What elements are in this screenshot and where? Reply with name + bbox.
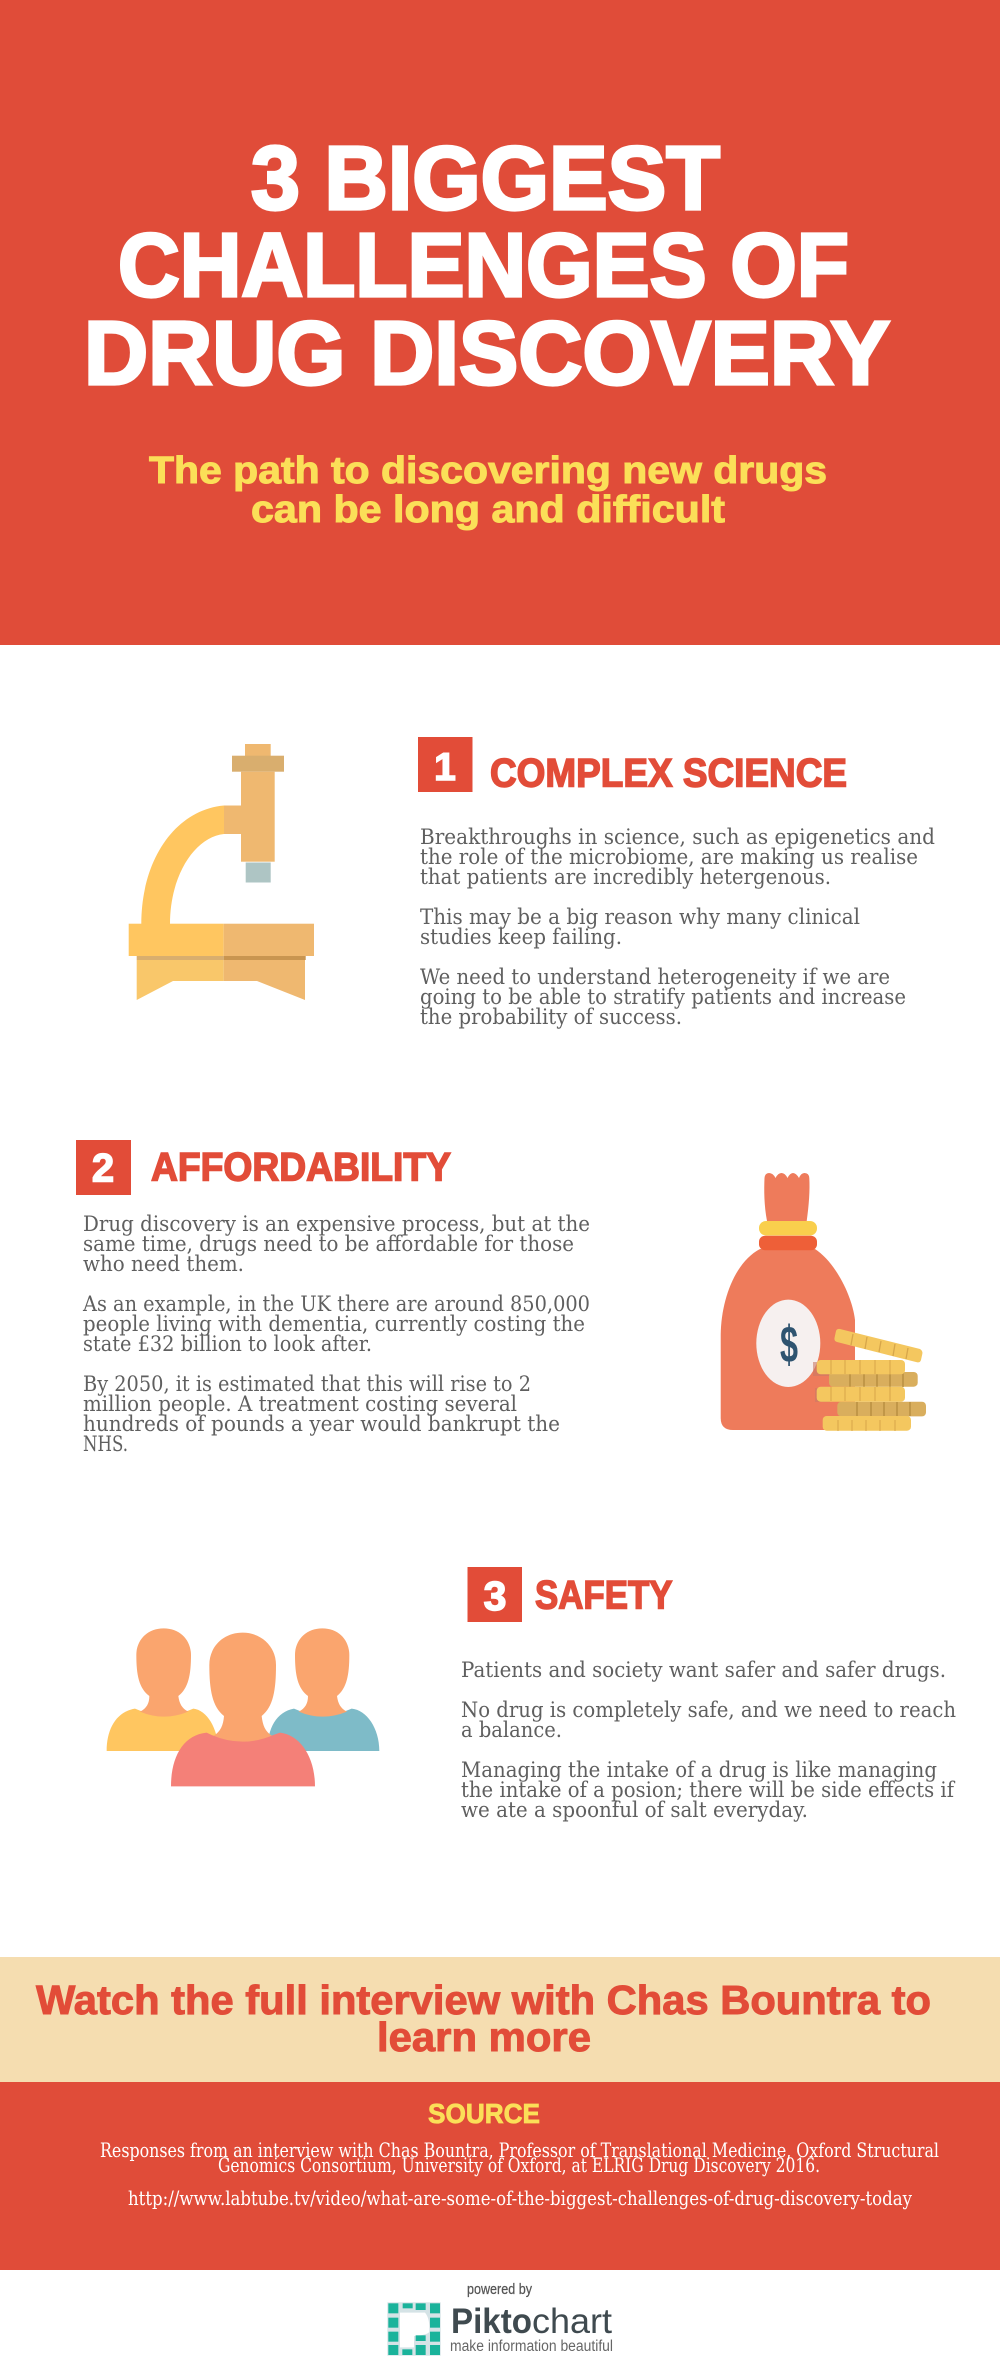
text block: complex science: the role of the microbiome, are making us realise: [420, 845, 918, 870]
text block: affordability: NHS.: [83, 1432, 128, 1457]
heading: affordability: AFFORDABILITY: [151, 1146, 451, 1190]
text block: affordability: As an example, in the UK there are around 850,000: [82, 1292, 590, 1317]
text block: affordability: million people. A treatment costing several: [83, 1392, 517, 1417]
text block: affordability: [82, 1212, 590, 1457]
panel: affordability: [76, 1140, 926, 1457]
number badge 1: 1: [434, 746, 456, 789]
panel: call to action: [0, 1957, 1000, 2082]
text block: affordability: Drug discovery is an expensive process, but at the: [83, 1212, 590, 1237]
call to action text: learn more: [377, 2014, 591, 2060]
text block: safety: we ate a spoonful of salt everyday.: [461, 1798, 808, 1823]
source text: Genomics Consortium, University of Oxford, at ELRIG Drug Discovery 2016.: [218, 2153, 820, 2177]
person: right: [267, 1628, 379, 1751]
icon: people: [107, 1628, 379, 1786]
text block: safety: Patients and society want safer and safer drugs.: [461, 1658, 946, 1683]
source text: [100, 2138, 939, 2210]
number badge 1: [418, 737, 472, 792]
call to action text: [36, 1977, 931, 2060]
subtitle: can be long and difficult: [251, 489, 725, 531]
title: CHALLENGES OF: [118, 216, 849, 316]
icon: money bag: $: [780, 1316, 798, 1374]
panel: piktochart footer: [387, 2281, 613, 2356]
text block: affordability: people living with dementia, currently costing the: [83, 1312, 585, 1337]
person: front: [171, 1633, 315, 1786]
text block: safety: the intake of a posion; there will be side effects if: [461, 1778, 956, 1803]
text block: affordability: state £32 billion to look after.: [83, 1332, 372, 1357]
text block: complex science: This may be a big reason why many clinical: [420, 905, 860, 930]
text block: complex science: the probability of success.: [420, 1005, 682, 1030]
panel: safety: [107, 1567, 956, 1823]
text block: affordability: By 2050, it is estimated that this will rise to 2: [83, 1372, 531, 1397]
text block: complex science: going to be able to stratify patients and increase: [420, 985, 906, 1010]
subtitle: [149, 450, 827, 531]
wordmark: Pikto: [451, 2302, 532, 2341]
person: left: [107, 1628, 218, 1751]
panel: source: [0, 2082, 1000, 2270]
title: 3 BIGGEST: [251, 129, 720, 229]
title: DRUG DISCOVERY: [84, 304, 890, 404]
number badge 3: 3: [484, 1573, 506, 1619]
text block: safety: Managing the intake of a drug is like managing: [461, 1758, 937, 1783]
text block: affordability: hundreds of pounds a year would bankrupt the: [83, 1412, 560, 1437]
title: [84, 129, 890, 404]
icon: money bag: [721, 1173, 926, 1431]
panel: complex science: [129, 737, 935, 1030]
coins: [817, 1329, 926, 1431]
number badge 2: 2: [92, 1146, 114, 1190]
text block: affordability: who need them.: [83, 1252, 244, 1277]
heading: complex science: COMPLEX SCIENCE: [490, 752, 847, 796]
heading: safety: SAFETY: [535, 1574, 673, 1618]
text block: complex science: Breakthroughs in science, such as epigenetics and: [420, 825, 935, 850]
icon: piktochart logo: [387, 2302, 441, 2356]
number badge 3: [468, 1567, 522, 1622]
text block: safety: No drug is completely safe, and we need to reach: [461, 1698, 956, 1723]
wordmark: chart: [532, 2302, 612, 2341]
text block: safety: [461, 1658, 956, 1823]
source heading: SOURCE: [428, 2098, 540, 2129]
powered by label: powered by: [467, 2281, 532, 2298]
panel: header: [0, 0, 1000, 645]
call to action text: Watch the full interview with Chas Bountra to: [36, 1977, 931, 2023]
wordmark: [451, 2302, 612, 2341]
text block: complex science: studies keep failing.: [420, 925, 622, 950]
icon: microscope: [129, 744, 314, 1000]
text block: safety: a balance.: [461, 1718, 562, 1743]
text block: complex science: [420, 825, 935, 1030]
text block: affordability: same time, drugs need to be affordable for those: [83, 1232, 574, 1257]
tagline: make information beautiful: [450, 2338, 613, 2355]
text block: complex science: that patients are incredibly hetergenous.: [420, 865, 831, 890]
text block: complex science: We need to understand heterogeneity if we are: [420, 965, 890, 990]
number badge 2: [76, 1140, 131, 1195]
subtitle: The path to discovering new drugs: [149, 450, 827, 492]
